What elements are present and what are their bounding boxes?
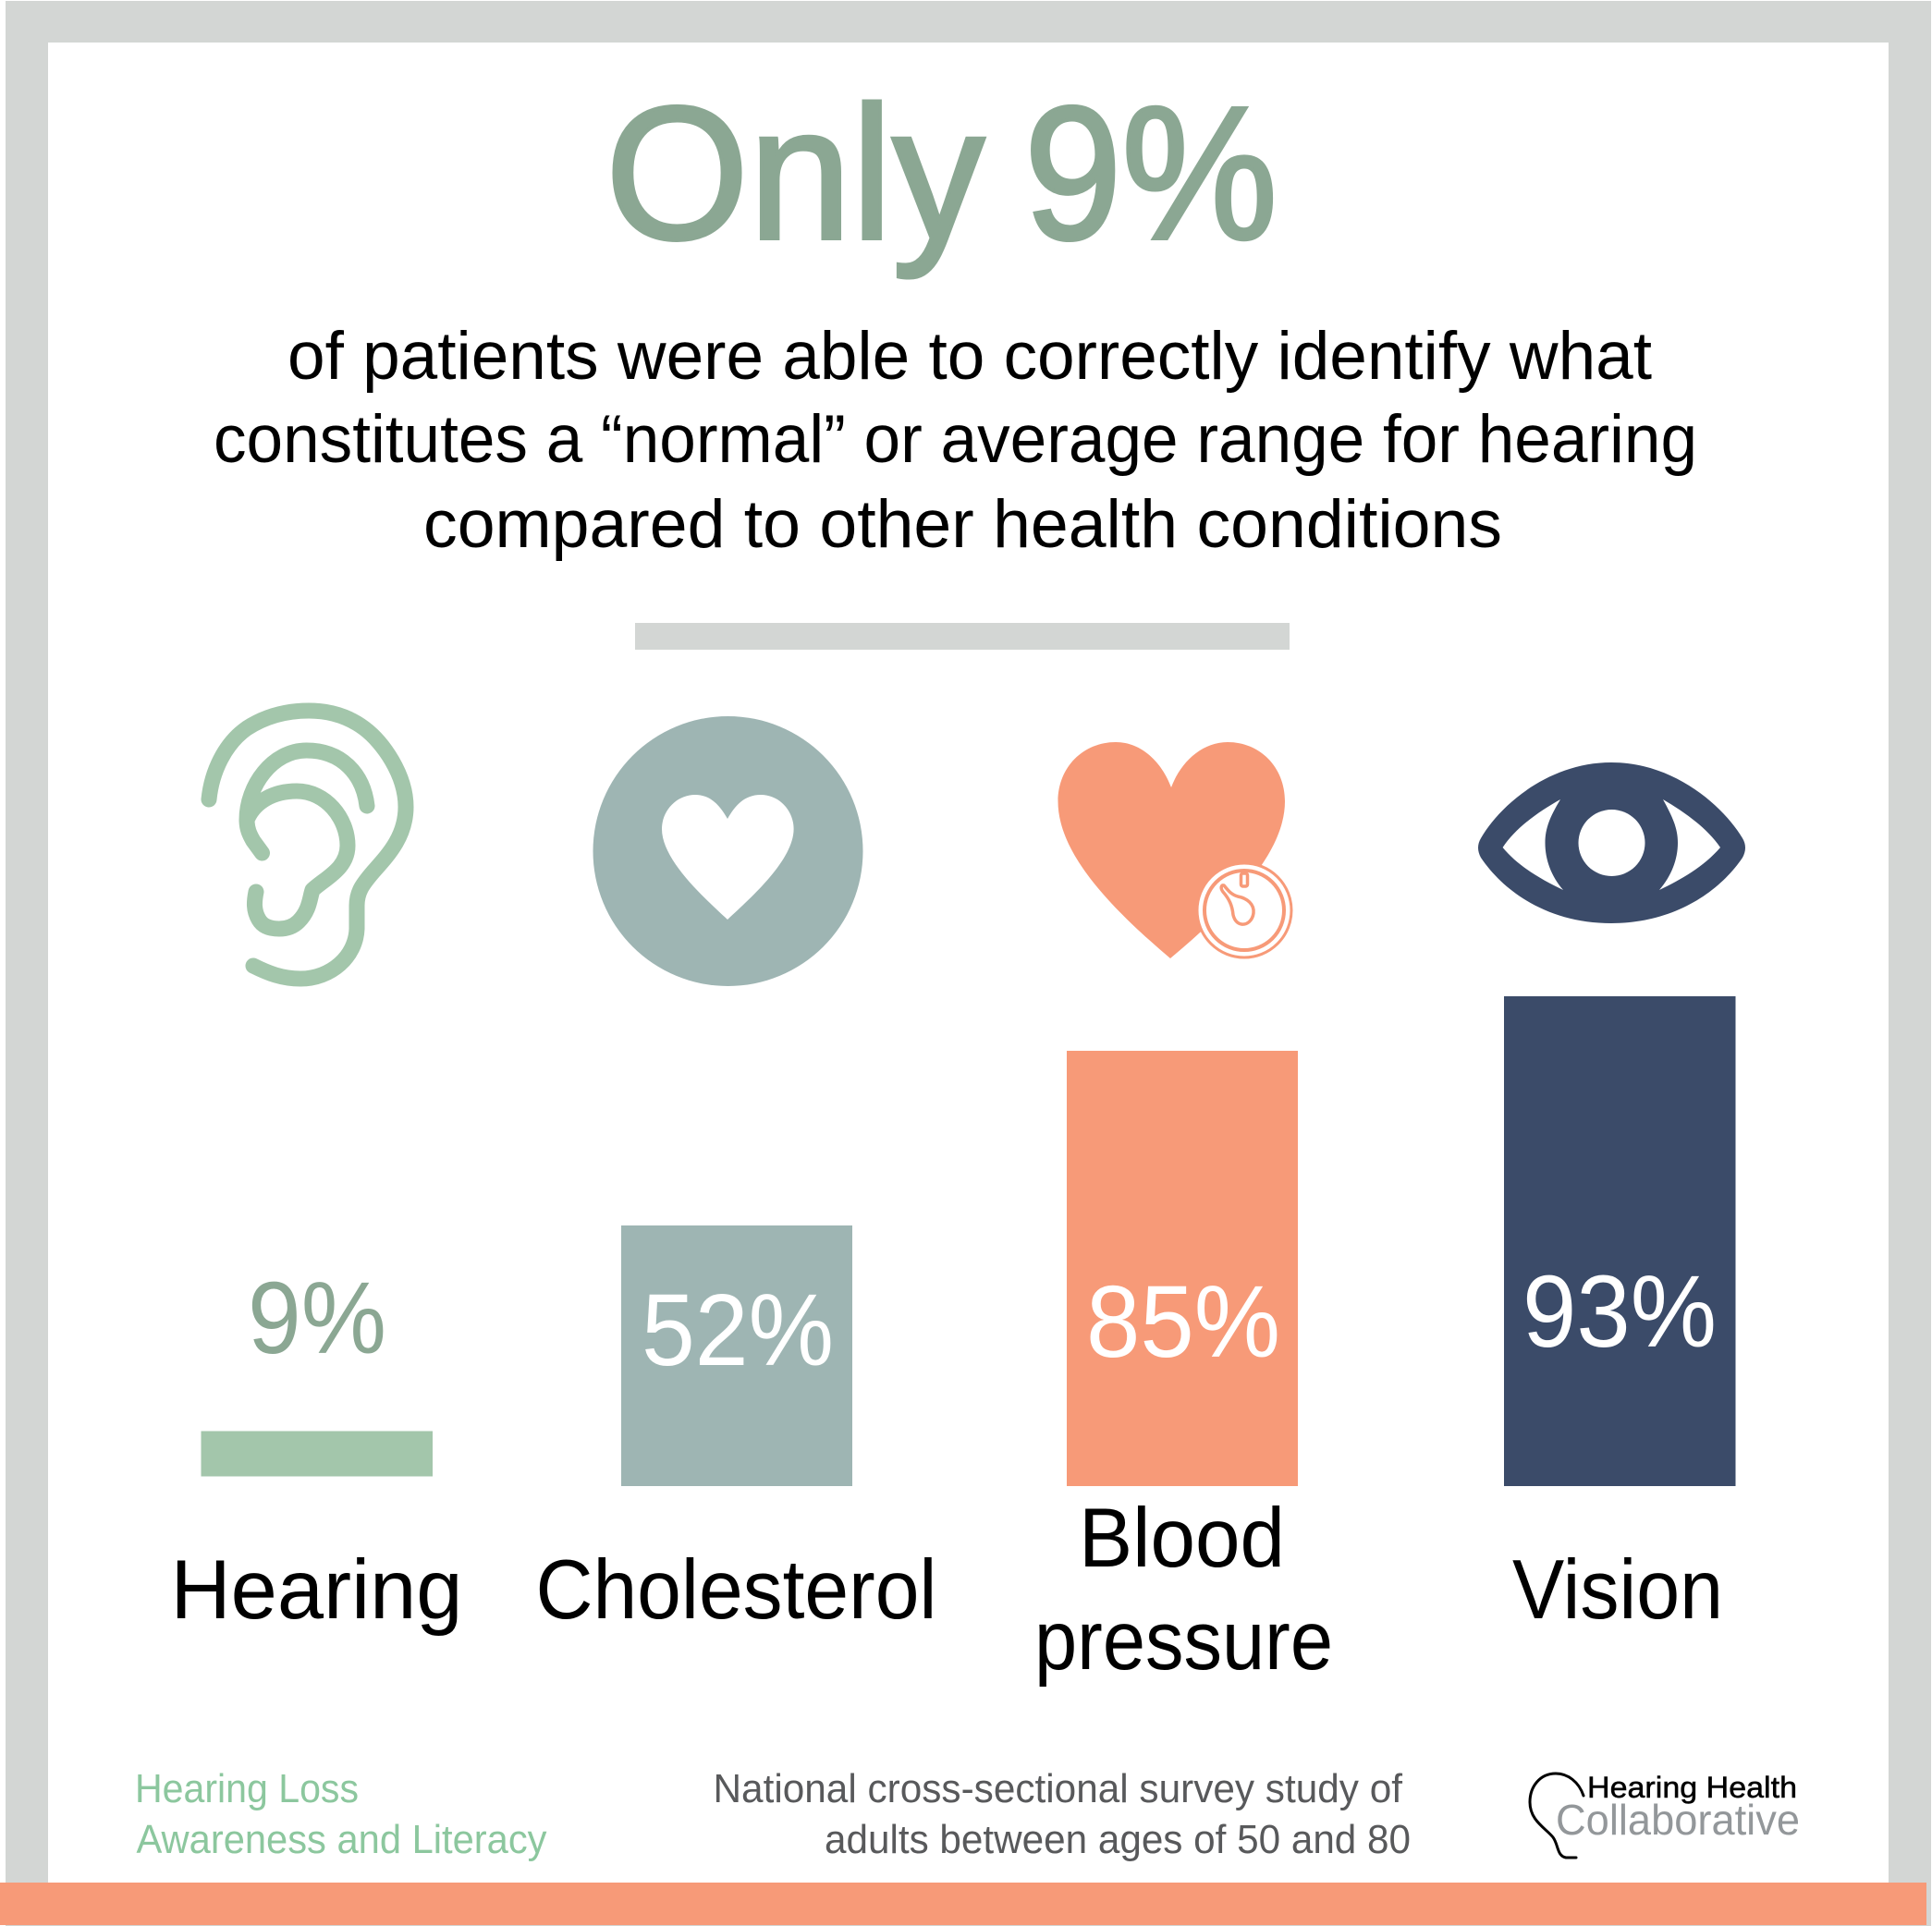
footer topic: Hearing Loss [135, 1766, 359, 1811]
logo: Hearing Health Collaborative: Hearing Health [1587, 1771, 1797, 1804]
bar: cholesterol [621, 1225, 852, 1486]
title: 9% [1024, 67, 1278, 279]
subtitle text block: constitutes a “normal” or average range for hearing [214, 402, 1697, 477]
value: 85%: 85% [1086, 1265, 1280, 1379]
label: blood pressure [1034, 1492, 1333, 1688]
title [605, 67, 1278, 279]
bar: hearing [202, 1431, 433, 1477]
logo: Hearing Health Collaborative: Collaborative [1556, 1796, 1800, 1844]
label: vision: Vision [1512, 1543, 1723, 1637]
label: blood pressure: Blood [1079, 1492, 1285, 1585]
value: 52%: 52% [642, 1274, 834, 1387]
footer source note: National cross-sectional survey study of [714, 1766, 1403, 1811]
icon: heart in circle [593, 716, 863, 986]
footer source note [714, 1766, 1411, 1862]
icon: heart with gauge [1058, 742, 1291, 958]
logo: Hearing Health Collaborative [1530, 1771, 1800, 1858]
bar: vision [1504, 996, 1736, 1486]
bottom accent bar [0, 1883, 1926, 1925]
footer topic: Awareness and Literacy [137, 1817, 547, 1862]
icon: eye [1478, 762, 1745, 923]
icon: ear [209, 711, 406, 979]
title: Only [605, 67, 984, 279]
subtitle text block [214, 319, 1697, 562]
label: blood pressure: pressure [1034, 1594, 1333, 1688]
label: hearing: Hearing [170, 1543, 462, 1637]
panel: cholesterol [536, 716, 937, 1637]
subtitle text block: compared to other health conditions [423, 487, 1502, 562]
label: cholesterol: Cholesterol [536, 1543, 937, 1637]
panel: vision [1478, 762, 1745, 1637]
footer source note: adults between ages of 50 and 80 [825, 1817, 1411, 1862]
bar: blood pressure [1067, 1051, 1298, 1486]
value: 93%: 93% [1522, 1255, 1717, 1369]
value: 9%: 9% [248, 1262, 386, 1375]
panel: blood pressure [1034, 742, 1333, 1688]
footer topic [135, 1766, 547, 1862]
panel: hearing [170, 711, 462, 1637]
subtitle text block: of patients were able to correctly identify what [287, 319, 1652, 394]
divider bar [635, 623, 1290, 650]
